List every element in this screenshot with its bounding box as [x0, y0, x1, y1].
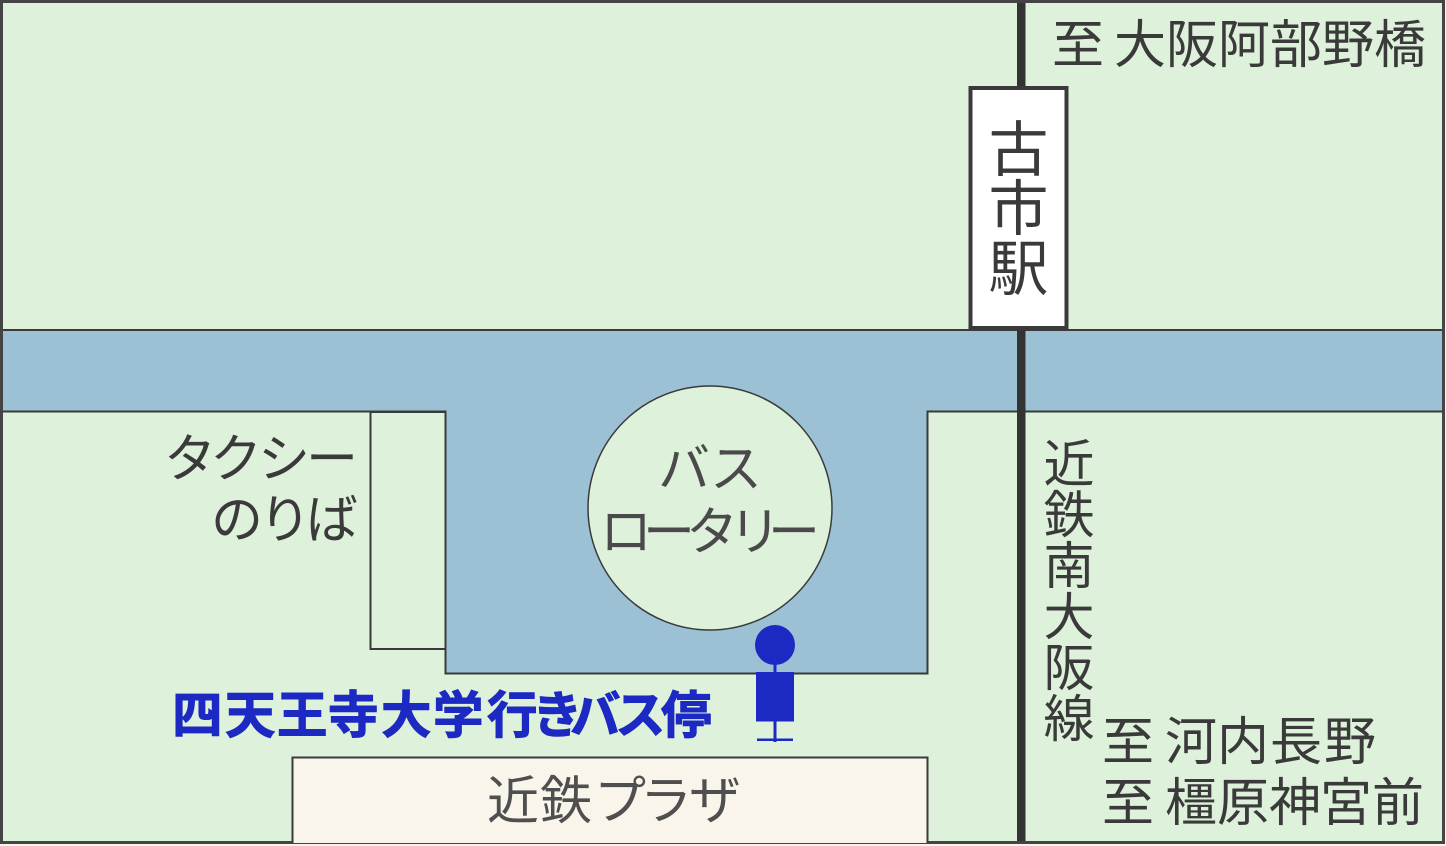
bus rotary label: ロータリー	[600, 504, 820, 562]
taxi stand	[370, 412, 446, 649]
line name label: 大	[1043, 589, 1095, 646]
taxi stand label: のりば	[211, 492, 358, 550]
line name label: 近	[1043, 436, 1095, 493]
Kintetsu Plaza building	[292, 758, 928, 843]
line name label: 線	[1043, 691, 1095, 748]
line name label: 南	[1043, 538, 1095, 595]
icon: bus stop pole	[755, 625, 795, 742]
taxi stand label: タクシー	[164, 431, 358, 489]
direction labels: Kawachinagano and Kashiharajingumae: 至 河内長野	[1102, 714, 1376, 772]
station name: 市	[988, 176, 1048, 243]
railway line	[1017, 2, 1026, 843]
Kintetsu Plaza label: 近鉄プラザ	[487, 773, 741, 831]
station box	[970, 88, 1066, 328]
station name: 古	[988, 117, 1048, 184]
bus rotary label: バス	[658, 441, 762, 499]
direction label: Osaka Abenobashi: 至 大阪阿部野橋	[1052, 17, 1426, 75]
road and bus rotary area	[2, 330, 1443, 674]
line name label: 阪	[1043, 640, 1095, 697]
line name label: 鉄	[1043, 487, 1095, 544]
bus rotary	[588, 386, 832, 630]
bus stop label: 四天王寺大学行きバス停	[172, 687, 712, 744]
direction labels: Kawachinagano and Kashiharajingumae: 至 橿原神宮前	[1102, 775, 1424, 833]
station name: 駅	[988, 236, 1048, 303]
